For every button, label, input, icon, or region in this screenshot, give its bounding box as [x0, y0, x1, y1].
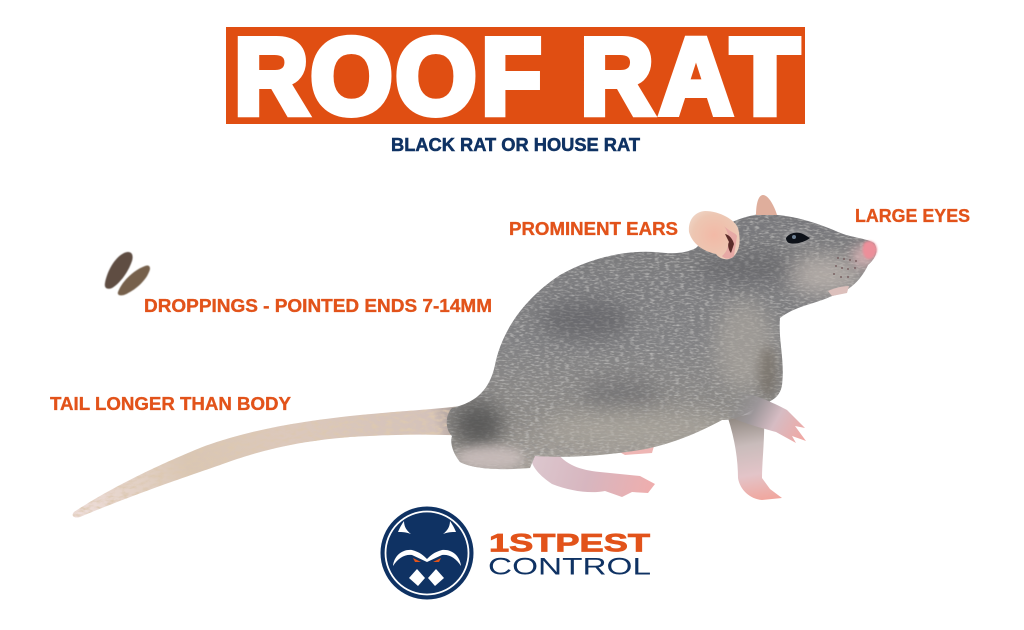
- title banner: R: [234, 16, 308, 136]
- rat body: [447, 214, 876, 469]
- title banner: T: [731, 16, 799, 136]
- logo emblem: [380, 506, 474, 600]
- label: large eyes: LARGE EYES: [855, 206, 970, 226]
- label: tail: TAIL LONGER THAN BODY: [50, 394, 291, 414]
- title banner: F: [482, 16, 542, 136]
- eye: [783, 229, 810, 247]
- logo wordmark: control: CONTROL: [488, 554, 651, 580]
- title banner: O: [396, 16, 476, 136]
- title banner: [226, 16, 805, 136]
- logo: 1st pest control: [380, 506, 651, 600]
- hind leg and foot: [531, 450, 655, 497]
- rat tail: [73, 405, 472, 518]
- rat illustration: [73, 195, 877, 518]
- title banner: O: [310, 16, 392, 136]
- label: droppings: DROPPINGS - POINTED ENDS 7-14MM: [144, 296, 492, 316]
- large ear: [689, 211, 740, 259]
- front arm and paw: [728, 392, 806, 443]
- nose: [863, 241, 877, 259]
- title banner: R: [580, 16, 654, 136]
- fur shading: [452, 244, 876, 470]
- label: prominent ears: PROMINENT EARS: [509, 219, 678, 239]
- far hind foot: [612, 446, 654, 455]
- small far ear: [756, 195, 777, 215]
- mouth: [828, 286, 849, 296]
- subtitle: BLACK RAT OR HOUSE RAT: [391, 135, 640, 155]
- icon: droppings: [105, 252, 150, 295]
- title banner: A: [660, 16, 732, 136]
- whisker marks: [833, 257, 857, 278]
- rear front leg: [728, 412, 782, 500]
- logo wordmark: 1st pest: 1STPEST: [489, 530, 650, 558]
